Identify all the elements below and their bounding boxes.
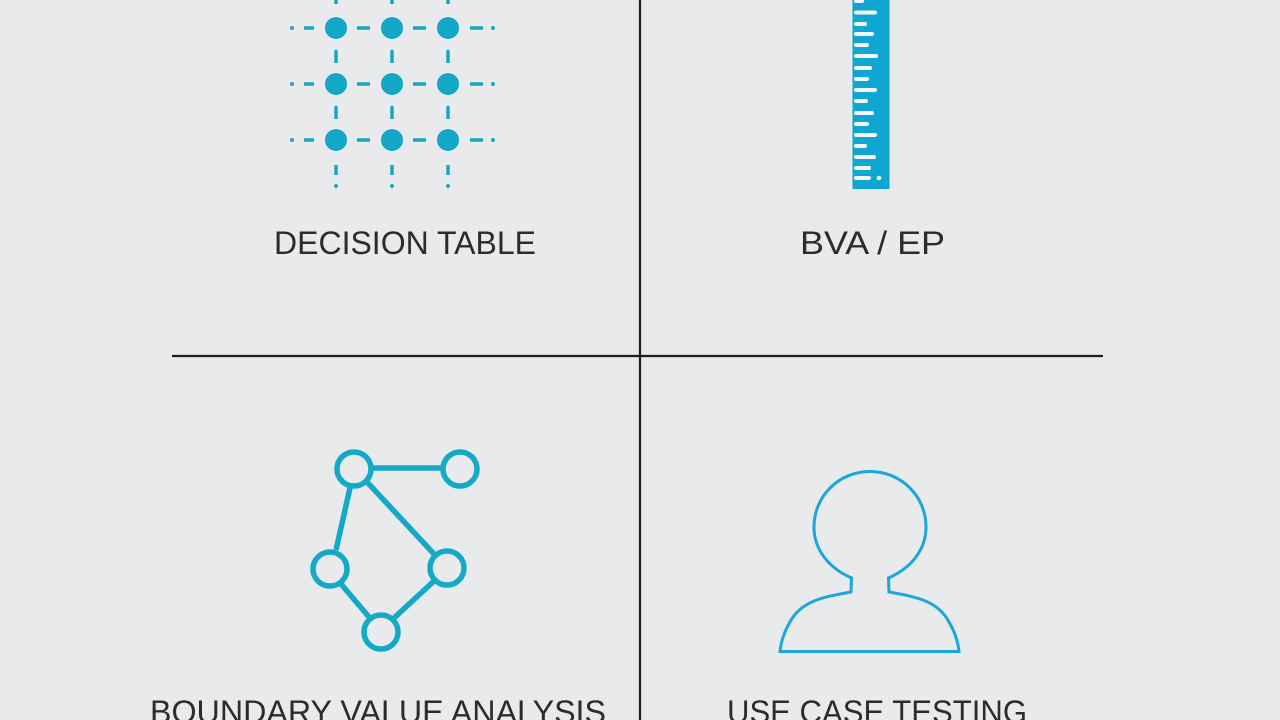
label: decision table: DECISION TABLE [274, 225, 536, 261]
panel: BVA / EP [800, 0, 945, 261]
label: BVA / EP: BVA / EP [800, 225, 945, 261]
icon: node graph [313, 452, 477, 649]
panel: use case testing [727, 472, 1027, 720]
panel: decision table [274, 0, 536, 261]
panel: boundary value analysis [150, 452, 606, 720]
icon: dotted grid [290, 0, 495, 188]
icon: ruler [852, 0, 890, 189]
icon: user outline [780, 472, 959, 652]
